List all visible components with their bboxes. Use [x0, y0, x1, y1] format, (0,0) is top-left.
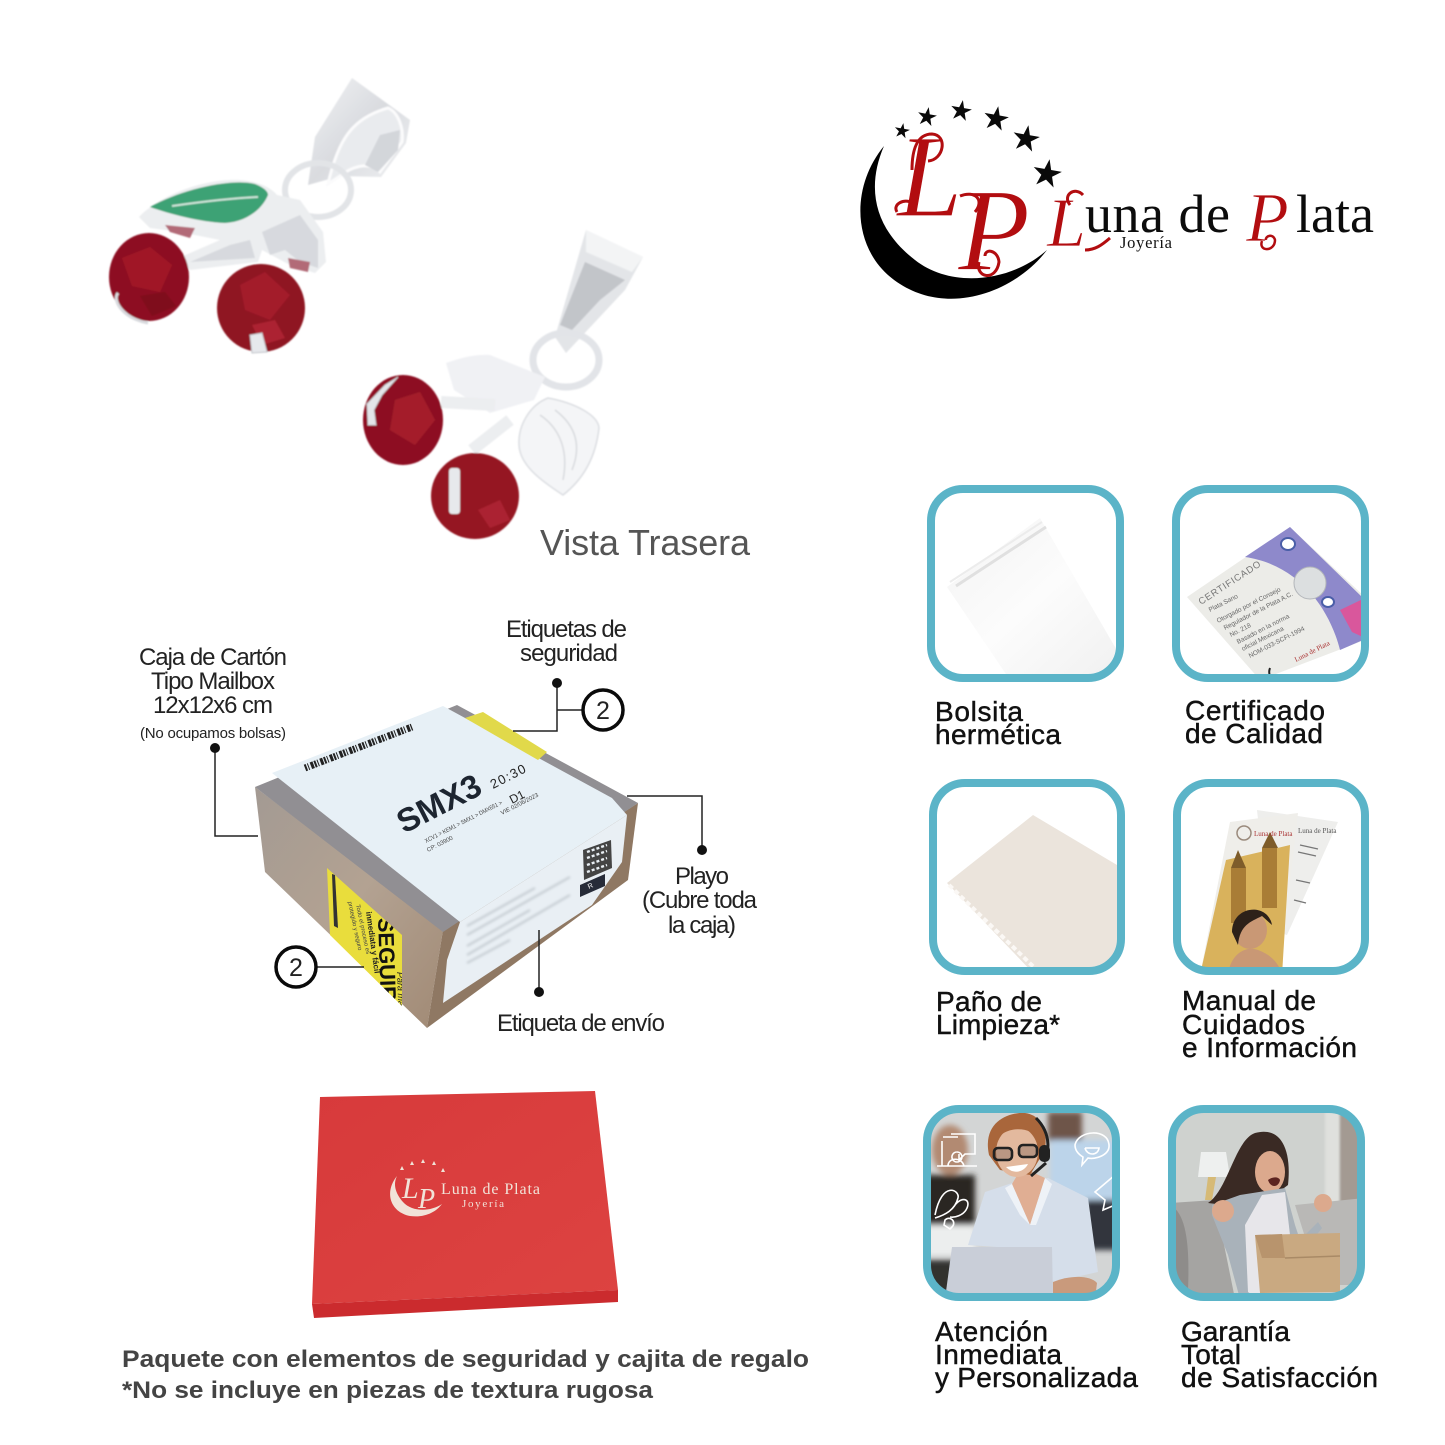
frame: [1177, 783, 1365, 971]
manual image: Luna de Plata: [1298, 827, 1337, 835]
label: de Satisfacción: [1181, 1362, 1378, 1393]
bail: [308, 78, 410, 185]
callout: caja de cartón: Caja de Cartón: [139, 644, 287, 671]
wordmark una de: una de: [1085, 184, 1230, 244]
cloth image: [947, 815, 1122, 975]
label: [1181, 1316, 1378, 1393]
seal text: SEGUIR: [373, 917, 401, 1003]
seal text: Todo el proceso es: [354, 904, 370, 955]
label address lines: [467, 877, 570, 963]
label: Paño de: [936, 986, 1042, 1017]
cherry upper: [363, 375, 443, 465]
wordmark sub: Joyería: Joyería: [1120, 233, 1173, 252]
label: y Personalizada: [935, 1362, 1138, 1393]
box logo: Joyería: [462, 1198, 505, 1210]
callout: etiquetas de seguridad: [506, 616, 627, 731]
R tag: R: [587, 882, 594, 891]
callout: caja de cartón: [139, 644, 287, 836]
callout: caja de cartón: Tipo Mailbox: [151, 668, 275, 695]
certificate image: NOM-033-SCFI-1994: [1248, 625, 1306, 660]
certificate image: No. 218: [1229, 622, 1253, 639]
label: Inmediata: [935, 1339, 1062, 1370]
label: e Información: [1182, 1032, 1357, 1063]
sofa: [1176, 1200, 1234, 1293]
certificate image: Luna de Plata: [1293, 639, 1332, 664]
certificate image: CERTIFICADO: [1197, 559, 1263, 608]
monogram flourishes: [896, 134, 999, 276]
callout: playo: la caja): [668, 912, 736, 939]
ring: [285, 163, 351, 217]
panel: garantía total: [1170, 1107, 1378, 1393]
monogram L: L: [895, 111, 963, 242]
crescent moon: [860, 146, 1047, 299]
callout: sello lateral: 2: [289, 954, 303, 982]
box logo: [390, 1159, 540, 1216]
callout: playo: (Cubre toda: [642, 887, 758, 914]
leaf vein: [172, 197, 258, 206]
label: [936, 986, 1060, 1040]
caption: Vista Trasera: Vista Trasera: [540, 522, 751, 563]
footer note: Paquete con elementos de seguridad y cajita de regalo: [122, 1346, 809, 1373]
stars: [893, 98, 1064, 188]
box side: [312, 1290, 618, 1318]
callout: etiqueta de envío: [497, 930, 665, 1037]
ring: [533, 333, 599, 387]
manual image: Luna de Plata: [1254, 830, 1293, 838]
callout: etiquetas de seguridad: Etiquetas de: [506, 616, 627, 643]
frame: [933, 783, 1121, 971]
wordmark L flourish: [1067, 191, 1110, 250]
shipping label side: [443, 815, 627, 1003]
panel: manual de cuidados: [1177, 783, 1365, 1063]
label: Atención: [935, 1316, 1048, 1347]
label: Garantía: [1181, 1316, 1290, 1347]
label text: hour: 20:30: [488, 761, 528, 792]
yellow seal side: [327, 868, 402, 1006]
callout: playo: Playo: [675, 863, 729, 890]
label: Bolsita: [935, 696, 1023, 727]
top plastic wrap: [255, 705, 638, 932]
bag image: [948, 521, 1116, 674]
label text: D1: D1: [507, 787, 527, 807]
box logo: L: [401, 1172, 419, 1205]
R tag: [580, 874, 605, 897]
label: Cuidados: [1182, 1009, 1305, 1040]
support agent photo: [931, 1113, 1112, 1293]
label: [935, 696, 1061, 750]
certificate image: Basado en la norma: [1236, 613, 1291, 646]
box lid: [312, 1091, 618, 1304]
box logo: Luna de Plata: [441, 1181, 540, 1198]
label: [1185, 695, 1325, 749]
label text: SMX3: SMX3: [390, 766, 487, 840]
seal text: [332, 874, 406, 1011]
certificate image: oficial Mexicana: [1241, 625, 1285, 653]
lamp: [1198, 1152, 1230, 1200]
label text: date: VIE 02/06/2023: [500, 792, 540, 817]
woman cardigan: [1212, 1188, 1322, 1299]
manual image: [1200, 810, 1338, 975]
panel: atención personalizada: [925, 1107, 1138, 1393]
callout: playo: [627, 796, 758, 939]
seal text: inmediata y fácil: [364, 911, 382, 974]
upper silver leaf: [446, 355, 545, 413]
label: [935, 1316, 1138, 1393]
woman hair: [1208, 1132, 1289, 1204]
certificate image: Plata Sano: [1208, 593, 1240, 614]
label: Total: [1181, 1339, 1241, 1370]
shipping label top: [272, 706, 627, 922]
label: Limpieza*: [936, 1009, 1060, 1040]
parcel: [1255, 1233, 1340, 1293]
frame: [1176, 489, 1365, 678]
barcode: [305, 727, 412, 768]
bail: [555, 230, 643, 353]
label: hermética: [935, 719, 1061, 750]
lower silver leaf: [519, 398, 599, 495]
label text: route: XCV1 > KEM1 > SMX1 > DMX651 >: [424, 800, 504, 845]
certificate image: [1187, 527, 1365, 683]
cherry left: [109, 233, 189, 323]
leaf reflection: [165, 225, 310, 272]
box logo: P: [417, 1184, 435, 1215]
frame: [1172, 1109, 1361, 1297]
happy customer photo: [1176, 1113, 1357, 1293]
callout: sello lateral: [276, 947, 364, 987]
pendant: back view: [363, 230, 643, 539]
right face: [427, 803, 638, 1028]
callout: etiqueta de envío: Etiqueta de envío: [497, 1010, 665, 1037]
left face: [255, 787, 443, 1028]
certificate image: Otorgado por el Consejo: [1216, 586, 1282, 625]
label: [1182, 985, 1357, 1063]
yellow seal top: [465, 712, 547, 760]
wordmark L: L: [1046, 185, 1086, 262]
panel: certificado de calidad: [1176, 489, 1365, 749]
leaf shading: [190, 215, 318, 268]
wordmark P: P: [1245, 180, 1289, 257]
woman shirt: [1245, 1192, 1290, 1299]
label text: postal code: CP: 03900: [426, 835, 455, 854]
label: Certificado: [1185, 695, 1325, 726]
logo: Luna de Plata: [860, 98, 1374, 299]
shipping box: [255, 705, 638, 1028]
label: Manual de: [1182, 985, 1316, 1016]
callout: caja de cartón: 12x12x6 cm: [153, 692, 273, 719]
cherry lower: [431, 453, 519, 539]
frame: [931, 489, 1120, 678]
callout: etiquetas de seguridad: 2: [596, 697, 610, 725]
pendant: front view with green leaf: [109, 78, 410, 353]
stems: [441, 402, 510, 450]
frame: [927, 1109, 1116, 1297]
seal text: protegido y seguro: [346, 901, 362, 952]
monogram P: P: [957, 165, 1030, 296]
cherry right: [217, 264, 305, 353]
footer note: *No se incluye en piezas de textura rugosa: [122, 1377, 654, 1404]
callout: caja de cartón: (No ocupamos bolsas): [140, 725, 286, 742]
woman face: [1255, 1151, 1285, 1193]
QR code: [583, 840, 612, 880]
certificate image: Regulador de la Plata A.C.: [1223, 591, 1294, 632]
footer note: [122, 1346, 809, 1404]
panel: bolsita hermética: [931, 489, 1125, 750]
wordmark lata: lata: [1296, 184, 1374, 244]
red gift box: [312, 1091, 618, 1318]
panel: paño de limpieza: [933, 783, 1122, 1040]
green enamel leaf: [150, 182, 268, 223]
wordmark P flourish: [1261, 236, 1275, 249]
leaf silver body: [139, 180, 326, 273]
label: de Calidad: [1185, 718, 1323, 749]
callout: etiquetas de seguridad: seguridad: [520, 640, 618, 667]
seal text: Para más: [395, 972, 406, 1011]
